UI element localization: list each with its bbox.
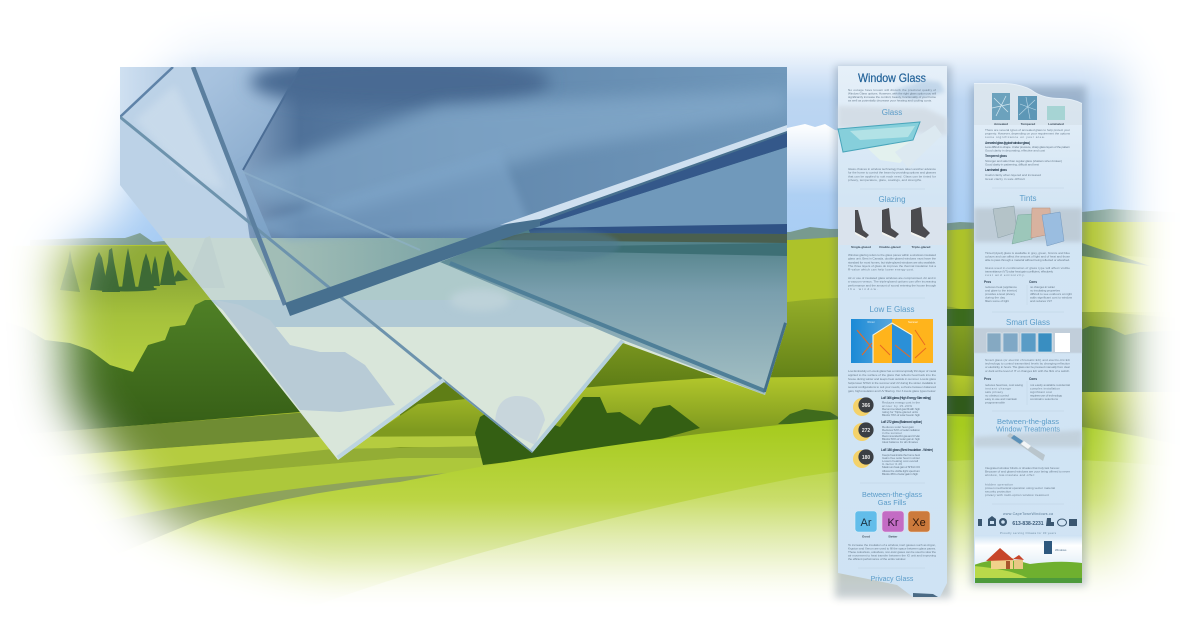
low-e 366 text: LoE 366 glass (High Energy Star rating): [881, 396, 931, 400]
tints cons: and reduces VLT: [1030, 299, 1052, 303]
glass text: that can be applied to suit each need. Glass can be tinted for: [848, 174, 936, 178]
smart glass text: or electricity, in hours. The glass can be pressed manually from clear: [985, 365, 1070, 369]
heading: smart glass: Smart Glass: [1006, 318, 1050, 327]
low-e 366 text: Blocks 70% of solar heat in high: [882, 413, 920, 417]
tints text: [985, 251, 1070, 277]
olive band under bush: [0, 410, 330, 460]
glazing text: R-value which can help lower energy cost.: [848, 268, 914, 272]
smart glass cons: significant cost: [1030, 390, 1052, 394]
grey backdrop: [974, 328, 1082, 353]
tints pros: reduces heat (appliance: [985, 285, 1017, 289]
reflected trees: [190, 236, 210, 288]
heading: glass: Glass: [882, 108, 902, 117]
upper field: [0, 222, 1200, 630]
glass text: for the home to control the beam by providing options and glasses: [848, 171, 936, 175]
bush left: [0, 300, 300, 438]
smart glass cons: Cons: [1029, 377, 1037, 381]
door: [1006, 561, 1010, 569]
low-e 272 text: Blocks 50% of solar gain in high: [882, 437, 920, 441]
glass type text: property. However, depending on your requirement the options: [985, 132, 1070, 136]
grey backdrop: [974, 208, 1082, 242]
secondary roof: [1013, 555, 1024, 560]
tints text: cost and emissivity.: [985, 273, 1025, 277]
low-e 272 text: [881, 420, 922, 444]
low e diagram: [851, 319, 933, 363]
navy strip: [528, 224, 787, 234]
band of reflected sky: [211, 300, 592, 327]
treatment text: privacy with multi-option window treatment: [985, 493, 1049, 497]
glazing text: [848, 253, 936, 291]
corner edge left: [120, 67, 173, 117]
tints text: able to pass through a material without being reflected or absorbed.: [985, 258, 1070, 262]
mid field tint below main edge: [334, 254, 529, 300]
treatment text: window, low-insulate and offer:: [985, 473, 1035, 477]
glass type text: Laminated glass: [985, 168, 1007, 172]
low-e 180 badge: [853, 449, 874, 468]
orange pane: [1031, 208, 1051, 238]
heading: window treatments: Window Treatments: [996, 424, 1060, 434]
lighter left pane soft centre: [140, 91, 218, 184]
certification icons: [978, 516, 1077, 526]
gas fill text: To increase the insulation of a window, inert gasses such as Argon,: [848, 543, 936, 547]
left field tint above reflection: [162, 238, 280, 300]
low-e 180 text: [881, 448, 933, 476]
gas fill text: the efficient performance of the entire window.: [848, 557, 906, 561]
smart glass pros: easy to use and maintain: [985, 397, 1017, 401]
infographic panel 1: [838, 66, 947, 597]
divider: [992, 187, 1064, 189]
privacy glass image fragment: [913, 593, 938, 597]
glass type text: Tempered glass: [985, 154, 1007, 158]
intro text: No outage have known will disturb the practical quality of: [848, 88, 936, 92]
heading: low e glass: Low E Glass: [870, 305, 914, 314]
heading: glazing: Glazing: [878, 195, 906, 204]
vertical divider: [1026, 285, 1028, 305]
right olive hill: [400, 298, 1200, 430]
smart glass cons: constrains selections: [1030, 397, 1058, 401]
intro text: Window Glass options. However, with the right glass option you will: [848, 92, 936, 96]
tints pros: provides a level privacy: [985, 292, 1015, 296]
smart glass pros: instant change: [985, 386, 1011, 390]
dark horizon band: [478, 224, 787, 258]
upper sky blue far pane: [530, 147, 787, 232]
low-e 272 text: Reduces solar heat gain: [882, 425, 914, 429]
treatment text: Because of and glazed windows are your being offered to never: [985, 470, 1070, 474]
glazing text: Air or use of insulated glass windows are compromised. Air and in: [848, 276, 936, 280]
element tile: argon: [855, 511, 877, 532]
tints cons: Cons: [1029, 280, 1037, 284]
low e text: helps lower SHGC in the summer and UV during the winter. Available in: [848, 381, 936, 385]
glass type text: [985, 128, 1070, 181]
forest trees: [60, 248, 188, 292]
low-e 366 text: rating for Triple-glazed units: [882, 410, 918, 414]
tints cons: difficult to see outdoors at night: [1030, 292, 1072, 296]
glass field tint: [120, 238, 787, 468]
sky and clouds: [974, 535, 1082, 565]
phone number: 613-838-2231: [1012, 521, 1044, 527]
smart glass pros: no obstruct control: [985, 394, 1009, 398]
intro text: as well as potentially decrease your heating and cooling costs.: [848, 98, 932, 102]
right half orange: [892, 319, 933, 363]
low-e 366 text: [881, 396, 931, 417]
annex wall: [1014, 560, 1023, 569]
smart glass pros: programmable: [985, 400, 1005, 404]
gas labels: [862, 534, 898, 538]
glazing text: Window glazing refers to the glass panes within a windows insulated: [848, 253, 936, 257]
heading: window treatments: Between-the-glass: [997, 417, 1059, 426]
glass type text: Less difficult to shape. Under pressure, sharp glass layers of the pattern: [985, 145, 1070, 149]
reflected cloud: [495, 396, 545, 445]
laminated glass sample: [1047, 106, 1065, 120]
brand mark: [1044, 541, 1052, 554]
bevel lower-left pane: [338, 380, 444, 458]
smart glass cons: [1029, 377, 1070, 401]
treatment text: proven mechanical operation using vector material: [985, 486, 1055, 490]
slider blue part: [1011, 435, 1023, 444]
glass type text: Good clarity in patterning, difficult and best: [985, 162, 1039, 166]
tints pros: during the day: [985, 296, 1005, 300]
low-e 366 text: Recommended gas fill with high: [882, 407, 920, 411]
sky: [0, 0, 1200, 250]
treatment text: Integrated window blinds or shades that truly last forever.: [985, 466, 1060, 470]
glass type text: some significance on your area.: [985, 135, 1045, 139]
bright reflection streak: [243, 90, 787, 215]
highlight on right part: [500, 125, 787, 225]
tinted panes illustration: [974, 206, 1082, 246]
smart glass cons: requires use of technology: [1030, 394, 1062, 398]
brand name: Windows: [1055, 548, 1067, 552]
rays: [857, 330, 926, 358]
teal sheet: [838, 122, 920, 152]
mid band: [0, 446, 490, 492]
left half blue: [851, 319, 892, 363]
glazing labels: Triple-glazed: [912, 245, 931, 249]
website: www.CapeTownWindows.ca: [1003, 512, 1053, 516]
glazing text: The three layers of glass do improve the thermal insulation but a: [848, 264, 936, 268]
bevel right pane: [765, 323, 786, 392]
bevel middle pane: [532, 341, 623, 451]
house outline: [873, 323, 912, 363]
gas labels: Better: [889, 534, 898, 538]
glass text: Glass choices in window technology have taken another advance: [848, 167, 936, 171]
house right blue: [892, 324, 912, 363]
low-e 180 text: Allows the visible light spectrum: [882, 469, 920, 473]
low-e 180 text: Blocks 45% of solar gain in high: [882, 472, 918, 476]
tempered glass sample: [1018, 96, 1037, 120]
smart glass pros: safe privacy: [985, 390, 1003, 394]
tints pros: [984, 280, 1017, 303]
smart glass text: or dark at the level of IT or changes EC with the flick of a switch.: [985, 369, 1070, 373]
title: Window Glass: [858, 71, 926, 85]
pale lime band: [0, 458, 490, 550]
low-e 366 badge: 366: [862, 403, 870, 409]
tints pros: Pros: [984, 280, 991, 284]
path and lower grass: [974, 578, 1082, 583]
low-e 180 text: U-factor 0.26: [882, 462, 902, 466]
diagram labels: Winter: [867, 320, 875, 324]
vertical divider: [1026, 381, 1028, 405]
gas labels: Good: [862, 534, 870, 538]
low-e 272 badge: [853, 422, 874, 441]
faint tree reflection: [500, 229, 620, 261]
heading: gas fills: Between-the-glass: [862, 490, 922, 499]
tile 4: [1038, 333, 1052, 352]
gas fill text: These colourless, odourless, non-toxic gases can be used to slow the: [848, 550, 936, 554]
glass type text: Great clarity in sale difficult: [985, 177, 1025, 181]
tints text: colours and can affect the amount of light and of heat and those: [985, 254, 1070, 258]
element tile: argon: Ar: [860, 517, 872, 529]
thick vertical-ish edge: [193, 67, 285, 305]
glass type text: Useful clarity when layered and increased: [985, 173, 1041, 177]
tile 1: [987, 333, 1001, 352]
gas fill text: Krypton and Xenon are used to fill the space between glass panes.: [848, 546, 936, 550]
treatment text: security protection: [985, 490, 1011, 494]
tints text: Glass used in combination of glass type will affect visible: [985, 266, 1070, 270]
glass text: privacy, temperature, glare, coatings, and strengths.: [848, 178, 922, 182]
low-e 272 text: Recommended for gas and U-Van: [882, 434, 920, 438]
smart glass cons: not easily available residential: [1030, 383, 1070, 387]
gas fill text: air movement to heat transfer between the IG unit and improving: [848, 554, 936, 558]
main glass edge: [285, 125, 787, 316]
low-e 272 text: in the summer: [882, 431, 902, 435]
dark shrub band between panels: [947, 396, 975, 414]
glass type text: There are several types of annealed glass to help protect your: [985, 128, 1070, 132]
panel 1 paper with torn bottom: [838, 66, 947, 597]
glazing labels: Double-glazed: [879, 245, 901, 249]
low-e 180 text: Gains free solar heat in winter: [882, 456, 920, 460]
light band: [0, 436, 490, 484]
low-e 180 badge: 180: [862, 455, 870, 461]
smart glass pros: reduces heat loss, cost saving: [985, 383, 1023, 387]
divider: [992, 410, 1064, 412]
soft glow in lower-left of big pane: [265, 166, 526, 240]
glazing text: standard for most homes, but triple-glazed windows are also available.: [848, 260, 936, 264]
long diagonal edge: [120, 117, 532, 453]
low-e 366 badge: [853, 397, 874, 416]
element tile: krypton: [882, 511, 904, 532]
main roof: [986, 548, 1014, 561]
pale sheet: [862, 132, 917, 163]
divider: [858, 567, 925, 569]
green pane: [1012, 214, 1033, 244]
left striped field: [0, 246, 480, 371]
tints cons: no insulating properties: [1030, 288, 1060, 292]
dark teal strip: [465, 243, 787, 256]
trees right of glass: [475, 397, 700, 465]
glass sky tint: [120, 67, 787, 240]
low e text: several configurations to suit your needs, a choice between balanced: [848, 385, 936, 389]
infographic panel 2: [974, 83, 1082, 583]
sample labels: Tempered: [1021, 122, 1035, 126]
glazing labels: Single-glazed: [851, 245, 871, 249]
divider: [992, 503, 1064, 505]
glazing illustration: [838, 207, 947, 245]
dark thin body of edge: [285, 125, 787, 316]
low-e 272 text: LoE 272 glass (Balanced option): [881, 420, 922, 424]
smart glass pros: [984, 377, 1023, 404]
annealed glass sample: [992, 93, 1010, 120]
house scene: [974, 535, 1082, 583]
foreground lighter hill: [250, 459, 1200, 630]
panel 2 paper with torn top: [974, 83, 1082, 583]
tints cons: no changes in winter: [1030, 285, 1055, 289]
house left orange: [873, 324, 892, 363]
inner corner edge: [243, 67, 301, 170]
gas fill text: [848, 543, 936, 561]
tints text: transmittance (VT) solar heat gain coefficient, effectively: [985, 270, 1053, 274]
tints text: Tinted (dyed) glass is available in grey, green, bronze and blue: [985, 251, 1070, 255]
low e text: house during winter and keeps heat outside in summer. Low-E glass: [848, 377, 936, 381]
low e text: gain, high-insulation and UV filtering. Our 3 low-E glass types below:: [848, 389, 936, 393]
tints pros: filters some of light: [985, 299, 1009, 303]
glazing text: performance and the amount of sound entering the house through: [848, 283, 936, 287]
low-e 272 text: Ideal balance for all climates: [882, 440, 918, 444]
element tile: xenon: Xe: [912, 517, 926, 529]
right dark diagonal band: [1070, 243, 1150, 266]
triple-glazed icon: [911, 207, 930, 238]
element tile: krypton: Kr: [888, 517, 899, 529]
big pane lower part: [250, 238, 468, 302]
low e text: [848, 369, 936, 393]
divider: [992, 311, 1064, 313]
olive strip: [490, 233, 787, 243]
low-e 272 text: Reduces 52% of solar radiation: [882, 428, 920, 432]
cloud patch at the bottom of far edge: [450, 289, 510, 311]
glass type text: Stronger and safer than regular glass (shatters when broken): [985, 159, 1062, 163]
dark mid band between panels: [947, 309, 975, 326]
far pane: [440, 230, 787, 395]
tints cons: [1029, 280, 1073, 303]
smart glass cons: complex installation: [1030, 386, 1060, 390]
tile 3: [1021, 333, 1036, 352]
walls: [991, 558, 1013, 569]
tile 2: [1003, 333, 1018, 352]
glazing text: a vacuum versus. The triple-glazed options can offer increasing: [848, 280, 936, 284]
right light field patch: [975, 250, 1200, 312]
divider: [860, 297, 925, 299]
contact note: Proudly serving Ottawa for 30 years: [1000, 531, 1057, 535]
lower right edge: [450, 263, 765, 391]
front lawn: [974, 566, 1035, 583]
panel shadows: [835, 66, 1086, 598]
smart glass pros: Pros: [984, 377, 991, 381]
heading: window treatments: [996, 417, 1060, 434]
grey pane: [993, 206, 1017, 238]
teal sheet highlight: [850, 126, 915, 140]
sample labels: Laminated: [1048, 122, 1064, 126]
glass type text: Annealed glass (typical window glass): [985, 141, 1030, 145]
heading: gas fills: [862, 490, 922, 507]
blinds illustration: [974, 430, 1082, 461]
grey streak: [838, 106, 947, 135]
treatment text: [985, 466, 1070, 497]
glazing labels: [851, 245, 931, 249]
sample labels: [994, 122, 1064, 126]
frame base shadows: [855, 232, 925, 240]
foreground hill: [0, 416, 1200, 630]
tile 5: [1055, 333, 1070, 352]
heading: privacy glass: Privacy Glass: [871, 576, 914, 583]
smart glass text: technology to control transmitted levels by changing reflection: [985, 362, 1070, 366]
double-glazed icon: [882, 208, 899, 238]
glazing text: glass unit. Best in Canada, double-glazed windows must have the: [848, 257, 936, 261]
dark top corner glow: [242, 67, 552, 110]
slider white part: [1021, 441, 1031, 449]
pane edge lines: [120, 67, 786, 458]
grey backdrop: [974, 430, 1082, 447]
main photo: stacked glass panes: [120, 56, 787, 468]
intro text: [848, 88, 936, 102]
divider: [860, 188, 925, 190]
low-e 180 text: Lowers heating cost overall: [882, 459, 918, 463]
low-e 180 text: LoE 180 glass (Best Insulation - Winter): [881, 448, 933, 452]
treatment text: hidden operation: [985, 482, 1013, 486]
smart glass text: Smart glass (or electric chromatic EC) and electro-tint EC: [985, 358, 1071, 362]
low e text: Low-Emissivity or Low-E glass has a microscopically thin layer of metal: [848, 369, 936, 373]
single-glazed icon: [855, 210, 869, 238]
heading: gas fills: Gas Fills: [878, 498, 907, 507]
low e text: applied to the surface of the glass that reflects heat back into the: [848, 373, 936, 377]
glazing text: the window.: [848, 287, 878, 291]
sample labels: Annealed: [994, 122, 1008, 126]
white cloud behind panels: [787, 124, 850, 195]
heading: tints: Tints: [1019, 194, 1037, 203]
mid pane between edge and corner: [210, 67, 300, 238]
smart glass text: [985, 358, 1071, 373]
low-e 366 text: Reduces energy cost in the: [882, 400, 920, 404]
pale sheet right: [895, 125, 942, 168]
small shrub on the right: [778, 409, 850, 424]
left pale pane: [120, 67, 250, 240]
low-e 180 text: Maximum heat gain of SHGC 0.6: [882, 465, 920, 469]
grey backdrop: [838, 207, 947, 245]
tints pros: and glare to the interior): [985, 288, 1017, 292]
distant hills: [30, 209, 1200, 250]
right dark shrubs: [1070, 326, 1200, 392]
blue pane: [1042, 212, 1064, 246]
slider tool: [1007, 433, 1045, 461]
top grey tint: [974, 84, 1082, 125]
left field bands: [0, 410, 490, 600]
low-e 272 badge: 272: [862, 428, 870, 434]
back hill: [974, 560, 1082, 583]
smart glass illustration: [974, 328, 1082, 353]
faint inner line: [243, 172, 420, 250]
reflected bush: [223, 310, 395, 412]
grey-olive band: [0, 472, 460, 600]
glass type text: Good clarity in decorating, effective and cost: [985, 148, 1045, 152]
low e diagram: Summer: [908, 320, 918, 324]
glass sheets illustration: [838, 106, 947, 168]
intro text: significantly increase the comfort, beauty, functionality of your home: [848, 95, 936, 99]
element tile: xenon: [908, 511, 930, 532]
smudge behind intro: [895, 80, 945, 100]
glass text: [848, 167, 936, 182]
low-e 180 text: Keeps heat inside the home best: [882, 453, 920, 457]
low-e 366 text: winter by 15-20%: [882, 404, 912, 408]
right lime hill: [360, 375, 1200, 450]
divider: [860, 482, 925, 484]
blue lower lip right part: [540, 133, 787, 226]
tints cons: adds significant cost to window: [1030, 296, 1073, 300]
